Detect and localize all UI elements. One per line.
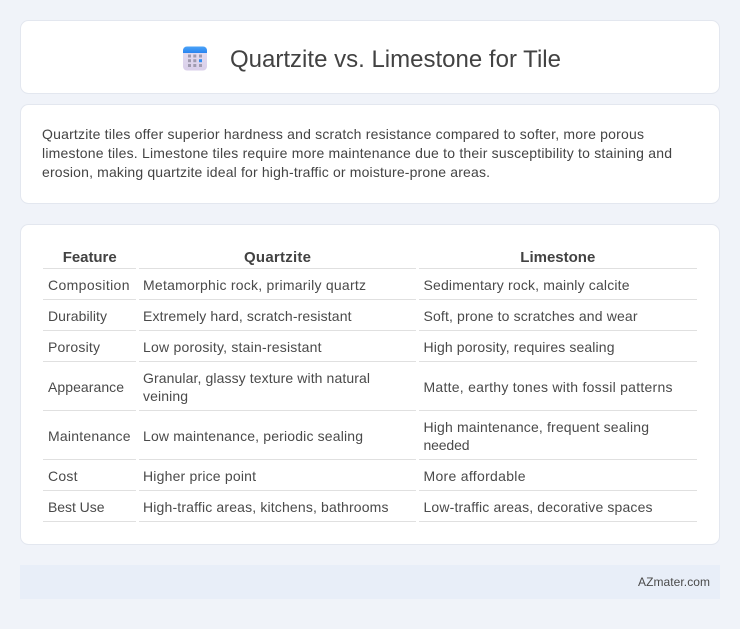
row: maintenance xyxy=(48,419,649,453)
row: appearance: Appearance xyxy=(48,379,124,395)
panel: title card xyxy=(20,20,720,94)
text block: summary paragraph xyxy=(42,126,672,180)
footer bar xyxy=(20,565,720,599)
row: porosity: High porosity, requires sealing xyxy=(424,339,614,355)
row: durability xyxy=(48,308,638,324)
row: appearance xyxy=(48,370,672,404)
table header xyxy=(63,249,595,266)
row: composition xyxy=(48,277,630,293)
row: porosity xyxy=(48,339,614,355)
row: cost: Cost xyxy=(48,468,78,484)
row: durability: Soft, prone to scratches and wear xyxy=(424,308,638,324)
row: durability: Durability xyxy=(48,308,107,324)
row: best use xyxy=(48,499,652,515)
text block: summary paragraph: limestone tiles. Limestone tiles require more maintenance due to their susceptibility to staining and xyxy=(42,145,672,161)
panel: summary xyxy=(20,104,720,204)
row: maintenance: High maintenance, frequent sealing xyxy=(424,419,649,435)
row: appearance: veining xyxy=(143,388,188,404)
row: porosity: Low porosity, stain-resistant xyxy=(143,339,322,355)
table header: Feature xyxy=(63,249,117,266)
row: maintenance: Maintenance xyxy=(48,428,131,444)
text block: summary paragraph: Quartzite tiles offer superior hardness and scratch resistance compared to softer, more porous xyxy=(42,126,644,142)
row: appearance: Granular, glassy texture with natural xyxy=(143,370,370,386)
row: best use: Best Use xyxy=(48,499,105,515)
row: best use: Low-traffic areas, decorative spaces xyxy=(424,499,652,515)
row: composition: Metamorphic rock, primarily quartz xyxy=(143,277,366,293)
row: best use: High-traffic areas, kitchens, bathrooms xyxy=(143,499,388,515)
text block: summary paragraph: erosion, making quartzite ideal for high-traffic or moisture-prone areas. xyxy=(42,164,490,180)
row: cost: Higher price point xyxy=(143,468,256,484)
row: cost: More affordable xyxy=(424,468,526,484)
panel: comparison table xyxy=(20,224,720,544)
icon: calendar xyxy=(183,46,207,70)
title: Quartzite vs. Limestone for Tile xyxy=(230,46,561,73)
row: composition: Sedimentary rock, mainly calcite xyxy=(424,277,630,293)
row: durability: Extremely hard, scratch-resistant xyxy=(143,308,352,324)
table header: Limestone xyxy=(520,249,595,266)
row: cost xyxy=(48,468,526,484)
row: maintenance: Low maintenance, periodic sealing xyxy=(143,428,363,444)
row: porosity: Porosity xyxy=(48,339,100,355)
row: composition: Composition xyxy=(48,277,130,293)
table header: Quartzite xyxy=(244,249,311,266)
row: appearance: Matte, earthy tones with fossil patterns xyxy=(424,379,672,395)
row: maintenance: needed xyxy=(424,437,470,453)
footer text: AZmater.com xyxy=(638,575,710,589)
